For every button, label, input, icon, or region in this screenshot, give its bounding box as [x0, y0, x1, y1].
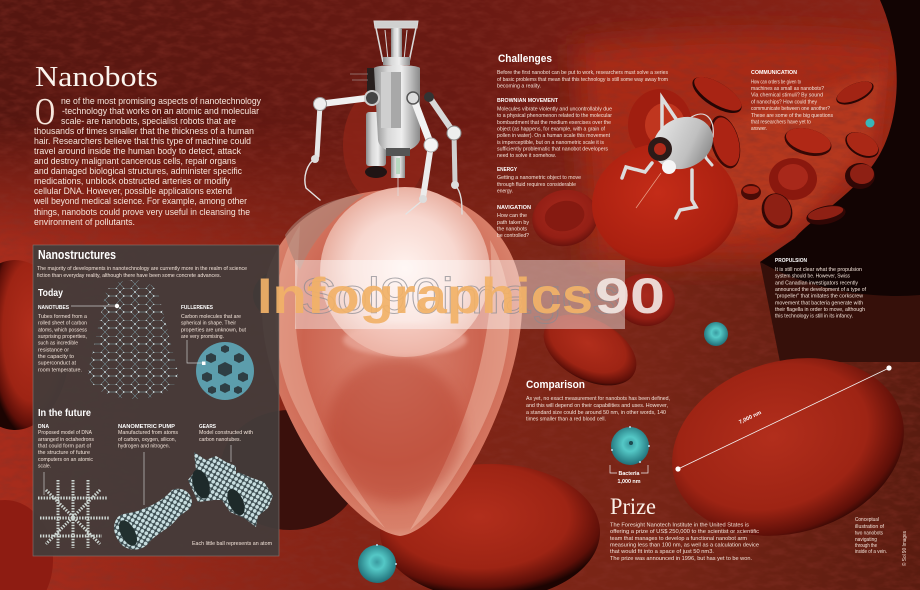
glowing inner sphere [320, 187, 490, 357]
DNA lattice diagram [38, 472, 110, 548]
intro text block: and damaged biological structures, administer specific [34, 165, 242, 176]
fullerenes text: properties are unknown, but [181, 327, 246, 333]
navigation [497, 205, 531, 239]
challenges intro: of basic problems that mean that this technology is still some way away from [497, 77, 668, 83]
intro text block: hair. Researchers believe that this type of machine could [34, 135, 251, 146]
challenges intro [497, 70, 668, 90]
communication text: machines as small as nanobots? [751, 86, 824, 92]
DNA text [38, 424, 94, 470]
comparison text: As yet, no exact measurement for nanobots has been defined, [526, 396, 670, 402]
illustration caption: two nanobots [855, 530, 883, 536]
challenges intro: becoming a reality. [497, 84, 541, 90]
fullerenes text: spherical in shape. Their [181, 321, 236, 327]
DNA text: arranged in octahedrons [38, 437, 94, 443]
fullerenes text: Carbon molecules that are [181, 314, 241, 320]
propulsion text: It is still not clear what the propulsion [775, 267, 862, 273]
illustration caption: navigating [855, 537, 877, 543]
nanotube diagram [71, 280, 178, 399]
bacterium: tiny far [866, 118, 874, 128]
brownian movement: is imperceptible, but on a nanometric scale it is [497, 140, 604, 146]
prize text [610, 522, 759, 562]
watermark [257, 260, 665, 329]
energy: energy. [497, 188, 513, 194]
navigation: NAVIGATION [497, 205, 531, 211]
propulsion text: announced the development of a type of [775, 287, 866, 293]
section: prize [610, 494, 759, 562]
propulsion text [775, 258, 866, 320]
illustration caption: through the [855, 543, 877, 549]
brownian movement: sufficiently problematic that nanobot developers [497, 146, 608, 152]
bacterium: centre right [704, 322, 728, 346]
DNA text: that could form part of [38, 444, 91, 450]
nanotubes text: resistance or [38, 347, 69, 353]
nanometric pump text: hydrogen and nitrogen. [118, 444, 170, 450]
nanotubes text: atoms, which possess [38, 327, 87, 333]
robot: needle tip [391, 156, 405, 196]
bacterium: comparison [611, 426, 650, 465]
communication text: that researchers have yet to [751, 120, 811, 126]
section: comparison [526, 379, 670, 485]
challenges intro: Before the first nanobot can be put to work, researchers must solve a series [497, 70, 668, 76]
brownian movement: BROWNIAN MOVEMENT [497, 98, 559, 104]
panel: nanostructures [33, 245, 279, 556]
propulsion text: movement that bacteria generate with [775, 300, 863, 306]
propulsion text: "propeller" that imitates the corkscrew [775, 294, 864, 300]
nanotubes text: rolled sheet of carbon [38, 321, 87, 327]
robot: main cylinder [374, 65, 420, 156]
robot: side tube [365, 112, 387, 178]
nanotubes text: the capacity to [38, 354, 74, 360]
comparison text: a standard size could be around 50 nm, in other words, 140 [526, 410, 666, 416]
prize text: measuring less than 100 nm, as well as a calculation device [610, 542, 759, 548]
communication text: Via chemical stimuli? By sound [751, 92, 823, 98]
intro text block: cellular DNA. However, possible applications extend [34, 185, 232, 196]
red blood cell size line [675, 365, 892, 472]
prize text: The Foresight Nanotech Institute in the United States is [610, 522, 749, 528]
nanobot capsule: glass egg [262, 190, 522, 536]
fullerenes text: FULLERENES [181, 305, 213, 311]
gears text: carbon nanotubes. [199, 437, 241, 443]
propulsion text: this technology is still in its infancy. [775, 314, 853, 320]
panel intro: fiction than everyday reality, although there have been some concrete advances. [37, 273, 221, 279]
nanometric pump text: NANOMETRIC PUMP [118, 424, 175, 430]
subheading: in the future: In the future [38, 407, 91, 419]
fullerenes text [181, 305, 246, 340]
communication text: of nanochips? How could they [751, 100, 817, 106]
watermark: Sol90images [300, 268, 620, 324]
nanotubes text [38, 305, 88, 373]
prize text: The prize was announced in 1996, but has yet to be won. [610, 556, 752, 562]
gears text: Model constructed with [199, 430, 253, 436]
robot: top cage [374, 21, 418, 65]
heading: challenges: Challenges [498, 53, 552, 65]
nanotubes text: superconduct at [38, 361, 76, 367]
atom note: Each little ball represents an atom [192, 541, 272, 547]
brownian movement [497, 98, 612, 159]
propulsion text: and Canadian investigators recently [775, 280, 858, 286]
illustration caption [855, 517, 887, 555]
DNA text: computers on an atomic [38, 457, 93, 463]
gears diagram [188, 445, 273, 527]
heading: prize: Prize [610, 494, 656, 519]
energy: through fluid requires considerable [497, 182, 576, 188]
intro text block: travel around inside the human body to detect, attack [34, 145, 241, 156]
brownian movement: bombardment that the medium exercises over the [497, 120, 611, 126]
illustration caption: illustration of [855, 524, 884, 530]
brownian movement: object (as happens, for example, with a grain of [497, 126, 605, 132]
panel intro [37, 266, 247, 279]
nanometric pump text: Manufactured from atoms [118, 430, 178, 436]
robot: middle right arm [406, 92, 438, 214]
DNA text: DNA [38, 424, 49, 430]
fullerenes text: are very promising. [181, 334, 224, 340]
red blood cells: mid and small group [527, 70, 883, 400]
small robot: legs [622, 98, 713, 218]
nanometric pump text: of carbon, oxygen, silicon, [118, 437, 176, 443]
nanometric pump text [118, 424, 178, 450]
watermark: 90 [595, 268, 665, 324]
communication text: communicate between one another? [751, 106, 830, 112]
robot: left arm [305, 91, 379, 200]
comparison text [526, 396, 670, 422]
panel intro: The majority of developments in nanotechnology are currently more in the realm of science [37, 266, 247, 272]
propulsion text: PROPULSION [775, 258, 807, 264]
intro text block: -technology that works on an atomic and molecular [62, 105, 259, 116]
heading: Nanobots: Nanobots [35, 61, 158, 93]
communication text: answer. [751, 126, 767, 132]
prize text: team that manages to develop a functional nanobot arm [610, 536, 747, 542]
navigation: be controlled? [497, 233, 529, 239]
heading: comparison: Comparison [526, 379, 585, 391]
propulsion text: their flagella in order to move, although [775, 307, 865, 313]
intro text block: medications, unblock obstructed arteries or modify [34, 175, 230, 186]
nanometric pump diagram [114, 452, 192, 550]
red blood cell size line: 7,000 nm [738, 410, 763, 426]
intro text block: thousands of times smaller that the thickness of a human [34, 125, 254, 136]
communication text: COMMUNICATION [751, 70, 797, 76]
bacterium: bottom [358, 544, 397, 583]
intro text block: scale- are nanobots, specialist robots that are [61, 115, 236, 126]
watermark: Infographics [257, 268, 593, 324]
brownian movement: to a physical phenomenon related to the molecular [497, 113, 612, 119]
energy [497, 167, 581, 194]
DNA text: the structure of future [38, 450, 90, 456]
copyright: © Sol 90 Images [901, 531, 908, 566]
intro text block: environment of pollutants. [34, 216, 135, 227]
small robot: body [644, 107, 722, 179]
brownian movement: pollen in water). On a human scale this movement [497, 133, 610, 139]
bacteria size bracket [610, 465, 648, 485]
section: challenges [497, 53, 668, 239]
intro text block: ne of the most promising aspects of nanotechnology [61, 95, 261, 106]
navigation: How can the [497, 213, 527, 219]
drop cap: O [35, 91, 55, 133]
energy: Getting a nanometric object to move [497, 175, 581, 181]
intro text block: well beyond medical science. For example, among other [33, 195, 247, 206]
bacteria [358, 118, 874, 583]
prize text: that would fit into a space of just 50 nm3. [610, 549, 714, 555]
navigation: path taken by [497, 220, 529, 226]
bacteria size bracket: 1,000 nm [618, 479, 641, 485]
DNA text: Proposed model of DNA [38, 430, 92, 436]
navigation: the nanobots [497, 226, 527, 232]
intro text block: things, nanobots could prove very useful in cleansing the [34, 206, 250, 217]
illustration caption: Conceptual [855, 517, 879, 523]
bacteria size bracket: Bacteria [618, 471, 640, 477]
nanotubes text: NANOTUBES [38, 305, 69, 311]
nanotubes text: surprising properties, [38, 334, 87, 340]
illustration caption: inside of a vein. [855, 549, 887, 555]
panel heading: Nanostructures [38, 248, 116, 262]
intro text block [33, 91, 261, 227]
propulsion text: system should be. However, Swiss [775, 274, 850, 280]
communication text: These are some of the big questions [751, 113, 833, 119]
intro text block: and destroy malignant cancerous cells, repair organs [34, 155, 236, 166]
communication text [751, 70, 833, 132]
energy: ENERGY [497, 167, 517, 173]
fullerene diagram [187, 340, 254, 400]
nanotubes text: Tubes formed from a [38, 314, 88, 320]
communication text: How can orders be given to [751, 80, 801, 86]
comparison text: times smaller than a red blood cell. [526, 416, 606, 422]
robot: far right arm [424, 92, 462, 214]
gears text [199, 424, 253, 443]
robot: rear camera block [350, 68, 377, 92]
gears text: GEARS [199, 424, 216, 430]
nanotubes text: such as incredible [38, 341, 78, 347]
brownian movement: need to solve it somehow. [497, 153, 556, 159]
DNA text: scale. [38, 464, 51, 470]
subheading: today: Today [38, 287, 63, 299]
comparison text: and this will depend on their capabilities and uses. However, [526, 403, 668, 409]
brownian movement: Molecules vibrate violently and uncontrollably due [497, 106, 612, 112]
large nanobot robot [305, 21, 462, 214]
small robot: laser beam [636, 173, 661, 208]
small nanobot robot [622, 98, 722, 218]
nanotubes text: room temperature. [38, 367, 82, 373]
prize text: offering a prize of US$ 250,000 to the scientist or scientific [610, 529, 759, 535]
